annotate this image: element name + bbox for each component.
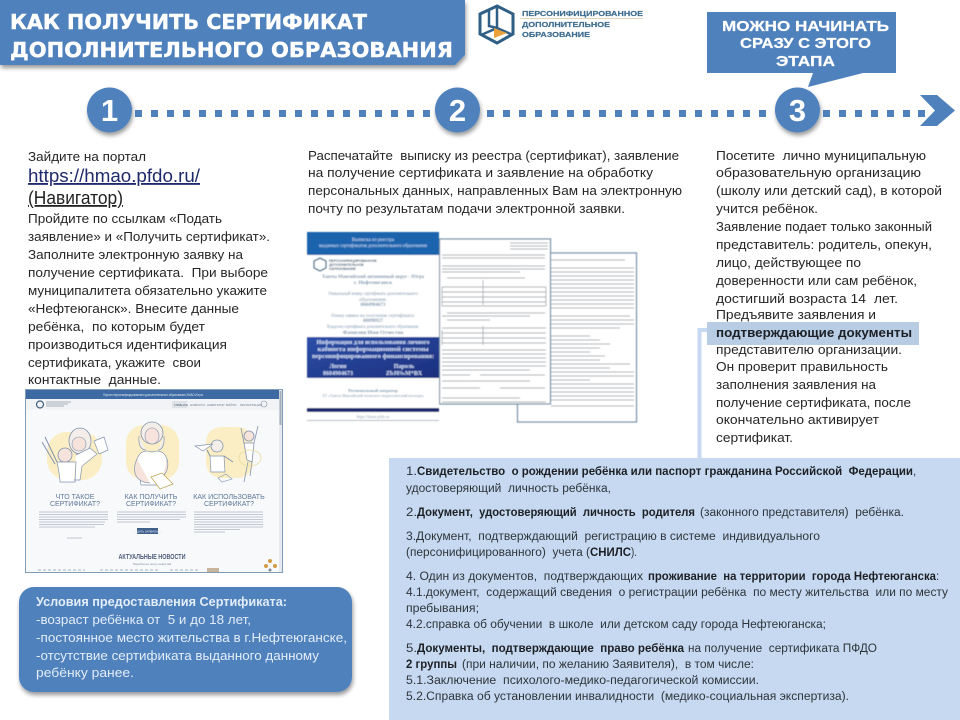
panel: certificate conditions: Условия предоставления Сертификата: [36,595,287,609]
connector line [700,330,707,458]
callout: start here: ЭТАПА [776,53,835,70]
document: consent page [518,253,636,422]
logo [480,6,643,43]
illustration: how to use certificate [195,426,261,482]
document: registry extract: 00090927 [363,319,384,324]
step 1 text: получение сертификата. При выборе [28,265,268,280]
step 1 text: контактные данные. [28,372,161,387]
step 3 text: сертификат. [716,430,793,445]
document: registry extract: Пароль [394,364,415,370]
logo: ОБРАЗОВАНИЕ [522,30,590,39]
step 2 text: персональных данных, направленных Вам на электронную [308,183,682,198]
site top bar: Портал персонифицированного дополнительного образования ХМАО-Югры [103,393,203,397]
step 3 text: Посетите лично муниципальную [716,148,926,163]
item 5: (при наличии, по желанию Заявителя), в том числе: [462,659,754,671]
document: registry extract: 8604904673 [360,303,386,308]
item 5: Документы, подтверждающие право ребёнка [417,643,685,655]
item 1 [406,466,916,495]
step 3 badge: 3 [789,93,806,128]
step 2 text: Распечатайте выписку из реестра (сертификат), заявление [308,148,679,163]
step 3 text: окончательно активирует [716,412,879,427]
item 2: (законного представителя) ребёнка. [700,507,904,519]
item 2 [406,507,904,519]
step 1 badge [87,88,132,132]
step 3 text: лицо, действующее по [716,255,861,270]
document: registry extract: выданных сертификатов дополнительного образования [319,244,428,249]
step 1 text: Заполните электронную заявку на [28,247,244,262]
item 4: 4.1.документ, содержащий сведения о регистрации ребёнка по месту жительства или по месту [406,587,948,599]
step 3 badge [775,88,820,132]
document: registry extract: Уникальный номер сертификата дополнительного [328,292,418,297]
step 1 text [28,149,270,387]
item 5 [406,643,877,703]
site navigation: ВОЙТИ [226,403,236,407]
item 4: проживание на территории города Нефтеюганска [648,571,937,583]
step 1 text: (Навигатор) [28,188,123,208]
illustration: how to get certificate [126,422,179,489]
panel: certificate conditions [19,587,352,692]
callout: start here: СРАЗУ С ЭТОГО [740,35,871,52]
card headings: КАК ПОЛУЧИТЬ [125,494,178,501]
step 2 text: почту по результатам подачи электронной заявки. [308,201,625,216]
item 5: на получение сертификата ПФДО [688,643,877,655]
step 2 text [308,148,682,216]
news heading: Перейти на ленту новостей [133,562,172,566]
step 1 text: муниципалитета обязательно укажите [28,283,267,298]
title banner [0,0,465,65]
site navigation [26,399,281,410]
step 3 text: Он проверит правильность [716,359,888,374]
card descriptions [39,512,263,538]
step 3 text: Заявление подает только законный [716,219,932,234]
document: registry extract: Ханты-Мансийский автономный округ - Югра [322,273,424,280]
news thumbnails [38,569,200,571]
step 1 badge: 1 [101,93,118,128]
step 3 text [707,148,942,445]
step 1 text: «Нефтеюганск». Внесите данные [28,301,239,316]
illustration: what is certificate [42,428,108,482]
callout: start here: МОЖНО НАЧИНАТЬ [722,18,889,35]
site navigation: НАВИГАТОР [207,403,225,407]
document: registry extract: ZbJ8‰M*BX [386,371,423,377]
step 2 badge: 2 [449,93,466,128]
title banner: ДОПОЛНИТЕЛЬНОГО ОБРАЗОВАНИЯ [10,38,453,62]
item 2: Документ, удостоверяющий личность родителя [417,507,695,519]
panel: certificate conditions: -возраст ребёнка от 5 и до 18 лет, [36,613,251,627]
apply button [133,528,162,534]
step 3 text: представителю организации. [716,342,902,357]
panel: required documents [389,458,960,720]
step 2 badge [435,88,480,132]
step 3 text: получение сертификата, после [716,395,911,410]
item 5: 2 группы [406,659,457,671]
step 3 text: представитель: родитель, опекун, [716,237,932,252]
card headings [50,494,265,508]
document: registry extract: https://hmao.pfdo.ru [357,414,389,419]
panel: certificate conditions: ребёнку ранее. [36,666,134,680]
step 3 text: доверенности или сам ребёнок, [716,273,917,288]
item 1: Свидетельство о рождении ребёнка или паспорт гражданина Российской Федерации [417,466,913,478]
step 1 text: https://hmao.pfdo.ru/ [28,165,201,186]
document: registry extract: Владелец сертификата дополнительного образования: [327,325,419,330]
timeline arrow [135,95,955,126]
document: application page [440,239,550,404]
card headings: СЕРТИФИКАТ? [204,501,254,508]
site navigation: НОВОСТИ [190,403,205,407]
step 2 text: на получение сертификата и заявление на обработку [308,165,654,180]
step 1 text: Пройдите по ссылкам «Подать [28,211,222,226]
item 5: 5.2.Справка об установлении инвалидности (медико-социальная экспертиза). [406,691,849,703]
widget icon [264,559,277,572]
document: registry extract: АУ «Ханты-Мансийский технолого-педагогический колледж» [322,393,424,398]
card headings: КАК ИСПОЛЬЗОВАТЬ [193,494,265,501]
card headings: СЕРТИФИКАТ? [126,501,176,508]
item 3 [406,531,820,559]
step 1 text: заявление» и «Получить сертификат». [28,229,270,244]
news heading [118,554,186,566]
step 3 text: учится ребёнок. [716,201,818,216]
logo: ПЕРСОНИФИЦИРОВАННОЕ [522,9,643,18]
title banner: КАК ПОЛУЧИТЬ СЕРТИФИКАТ [10,10,367,34]
document: registry extract: образования: [359,298,387,303]
document: registry extract: 8604904673 [323,371,353,377]
document: registry extract: Выписка из реестра [352,238,395,243]
document: registry extract: кабинета информационной системы [318,346,429,353]
step 3 text: подтверждающие документы [716,325,912,340]
document: registry extract: Информация для использования личного [316,339,430,346]
document: registry extract: Фамилия Имя Отчество [343,330,404,336]
apply button: ПОДАТЬ ЗАЯВЛЕНИЕ [133,530,162,534]
document: registry extract: персонифицированного финансирования: [312,353,434,360]
news heading: АКТУАЛЬНЫЕ НОВОСТИ [118,554,186,561]
site top bar [26,390,281,399]
item 4 [406,571,948,631]
step 3 text: (школу или детский сад), в которой [716,183,942,198]
step 1 text: производиться идентификация [28,337,227,352]
item 3: ). [631,547,637,559]
step 3 text: заполнения заявления на [716,377,877,392]
item 1: 1. [406,466,417,478]
item 2: 2. [406,507,417,519]
document: registry extract [307,232,439,422]
document: registry extract: г. Нефтеюганск [354,279,393,286]
site navigation: ГЛАВНАЯ [174,403,188,407]
item 4: : [936,571,939,583]
document: registry extract: ПЕРСОНИФИЦИРОВАННОЕ [329,259,378,263]
item 3: 3.Документ, подтверждающий регистрацию в системе индивидуального [406,531,820,543]
document: registry extract: Региональный оператор [348,388,398,393]
step 1 text: сертификата, укажите свои [28,355,201,370]
item 4: пребывания; [406,603,479,615]
step 3 text: образовательную организацию [716,165,921,180]
step 1 text: ребёнка, по которым будет [28,319,205,334]
step 1 text: Зайдите на портал [28,149,146,164]
document: registry extract: ОБРАЗОВАНИЕ [329,267,357,271]
card headings: ЧТО ТАКОЕ [56,494,95,501]
panel: certificate conditions: -постоянное место жительства в г.Нефтеюганске, [36,631,347,645]
item 1: , [913,466,916,478]
document: registry extract: Номер заявки на получение сертификата: [331,314,415,319]
logo: ДОПОЛНИТЕЛЬНОЕ [522,20,610,29]
item 1: удостоверяющий личность ребёнка, [406,483,611,495]
site navigation: РЕГИСТРАЦИЯ [240,403,262,407]
item 4: 4.2.справка об обучении в школе или детском саду города Нефтеюганска; [406,619,826,631]
website screenshot [26,390,282,572]
panel: certificate conditions: -отсутствие сертификата выданного данному [36,649,320,663]
item 3: (персонифицированного) учета ( [406,547,590,559]
document samples [307,232,636,422]
card headings: СЕРТИФИКАТ? [50,501,100,508]
item 5: 5. [406,643,417,655]
item 5: 5.1.Заключение психолого-медико-педагогической комиссии. [406,675,759,687]
item 3: СНИЛС [590,547,631,559]
step 3 text: достигший возраста 14 лет. [716,291,898,306]
document: registry extract: ДОПОЛНИТЕЛЬНОЕ [329,263,365,267]
item 4: 4. Один из документов, подтверждающих [406,571,643,583]
scrollbar [279,390,282,572]
step 3 text: Предъявите заявления и [716,307,876,322]
callout: start here [707,12,896,87]
document: registry extract: Логин [330,364,347,370]
